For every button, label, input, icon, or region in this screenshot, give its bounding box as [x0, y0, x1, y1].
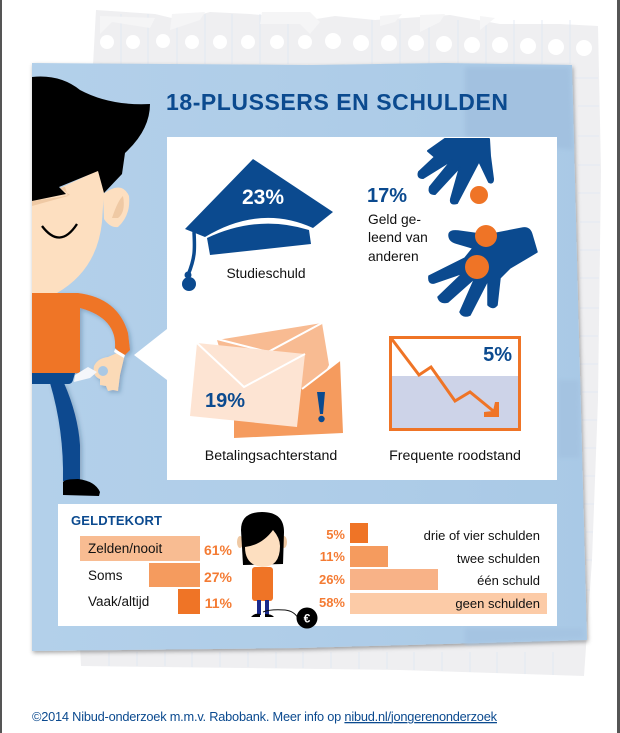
panel: geldtekort — [58, 504, 557, 628]
blue background panel — [32, 63, 587, 651]
bar chart: geldtekort frequency: 61% — [204, 542, 233, 558]
ear — [103, 187, 129, 227]
bar chart: number of debts: 58% — [319, 595, 345, 610]
finger ring gap — [98, 366, 108, 376]
bar chart: number of debts: geen schulden — [455, 596, 540, 611]
bar chart: number of debts: 5% — [326, 527, 345, 542]
heading: geldtekort: GELDTEKORT — [71, 513, 162, 528]
icon: hands with coins, 17% geld geleend: Geld ge- — [368, 212, 421, 227]
icon: hands with coins, 17% geld geleend — [367, 139, 537, 316]
icon: hands with coins, 17% geld geleend: leend van — [368, 230, 428, 245]
bar chart: number of debts: één schuld — [477, 573, 540, 588]
icon: falling chart, 5% frequente roodstand: 5% — [483, 344, 512, 366]
title: 18-PLUSSERS EN SCHULDEN — [166, 89, 508, 115]
hand — [94, 353, 124, 391]
icon: graduation cap, 23% studieschuld: 23% — [242, 186, 284, 209]
panel: debt types — [134, 137, 557, 480]
bar chart: geldtekort frequency: 11% — [205, 595, 233, 611]
shoe — [63, 479, 100, 496]
bar chart: geldtekort frequency — [80, 536, 233, 614]
icon: graduation cap, 23% studieschuld: Studieschuld — [226, 266, 306, 281]
bar chart: number of debts: twee schulden — [457, 551, 540, 566]
bar chart: number of debts: 11% — [320, 549, 345, 564]
bar chart: geldtekort frequency: Zelden/nooit — [88, 541, 163, 556]
character: man with pointing hand — [32, 77, 150, 496]
icon: graduation cap, 23% studieschuld — [182, 159, 333, 291]
icon: girl with ball and chain: € — [304, 612, 311, 626]
icon: girl with ball and chain — [237, 512, 318, 628]
bar chart: geldtekort frequency: Vaak/altijd — [88, 594, 149, 609]
leg — [50, 383, 80, 481]
icon: hands with coins, 17% geld geleend: 17% — [367, 185, 407, 207]
bar chart: number of debts — [319, 523, 547, 614]
mouth — [42, 224, 77, 238]
bar chart: geldtekort frequency: Soms — [88, 568, 123, 583]
icon: hands with coins, 17% geld geleend: anderen — [368, 249, 419, 264]
face — [32, 170, 104, 293]
punched holes — [100, 12, 592, 56]
cuff — [114, 349, 125, 358]
bar chart: number of debts: 26% — [319, 572, 345, 587]
bar chart: geldtekort frequency: 27% — [204, 569, 233, 585]
handkerchief — [74, 367, 97, 382]
icon: falling chart, 5% frequente roodstand: Frequente roodstand — [389, 448, 521, 464]
torso and arm — [32, 293, 130, 373]
icon: falling chart, 5% frequente roodstand — [389, 338, 521, 464]
icon: envelopes, 19% betalingsachterstand: Betalingsachterstand — [205, 448, 337, 464]
hair — [32, 77, 150, 201]
icon: envelopes, 19% betalingsachterstand — [190, 323, 343, 464]
notebook grid lines — [109, 14, 600, 675]
footer credit: ©2014 Nibud-onderzoek m.m.v. Rabobank. Meer info op nibud.nl/jongerenonderzoek — [32, 709, 498, 724]
icon: envelopes, 19% betalingsachterstand: 19% — [205, 390, 245, 412]
torn notebook paper — [80, 10, 601, 676]
trousers — [32, 373, 75, 384]
bar chart: number of debts: drie of vier schulden — [424, 528, 540, 543]
